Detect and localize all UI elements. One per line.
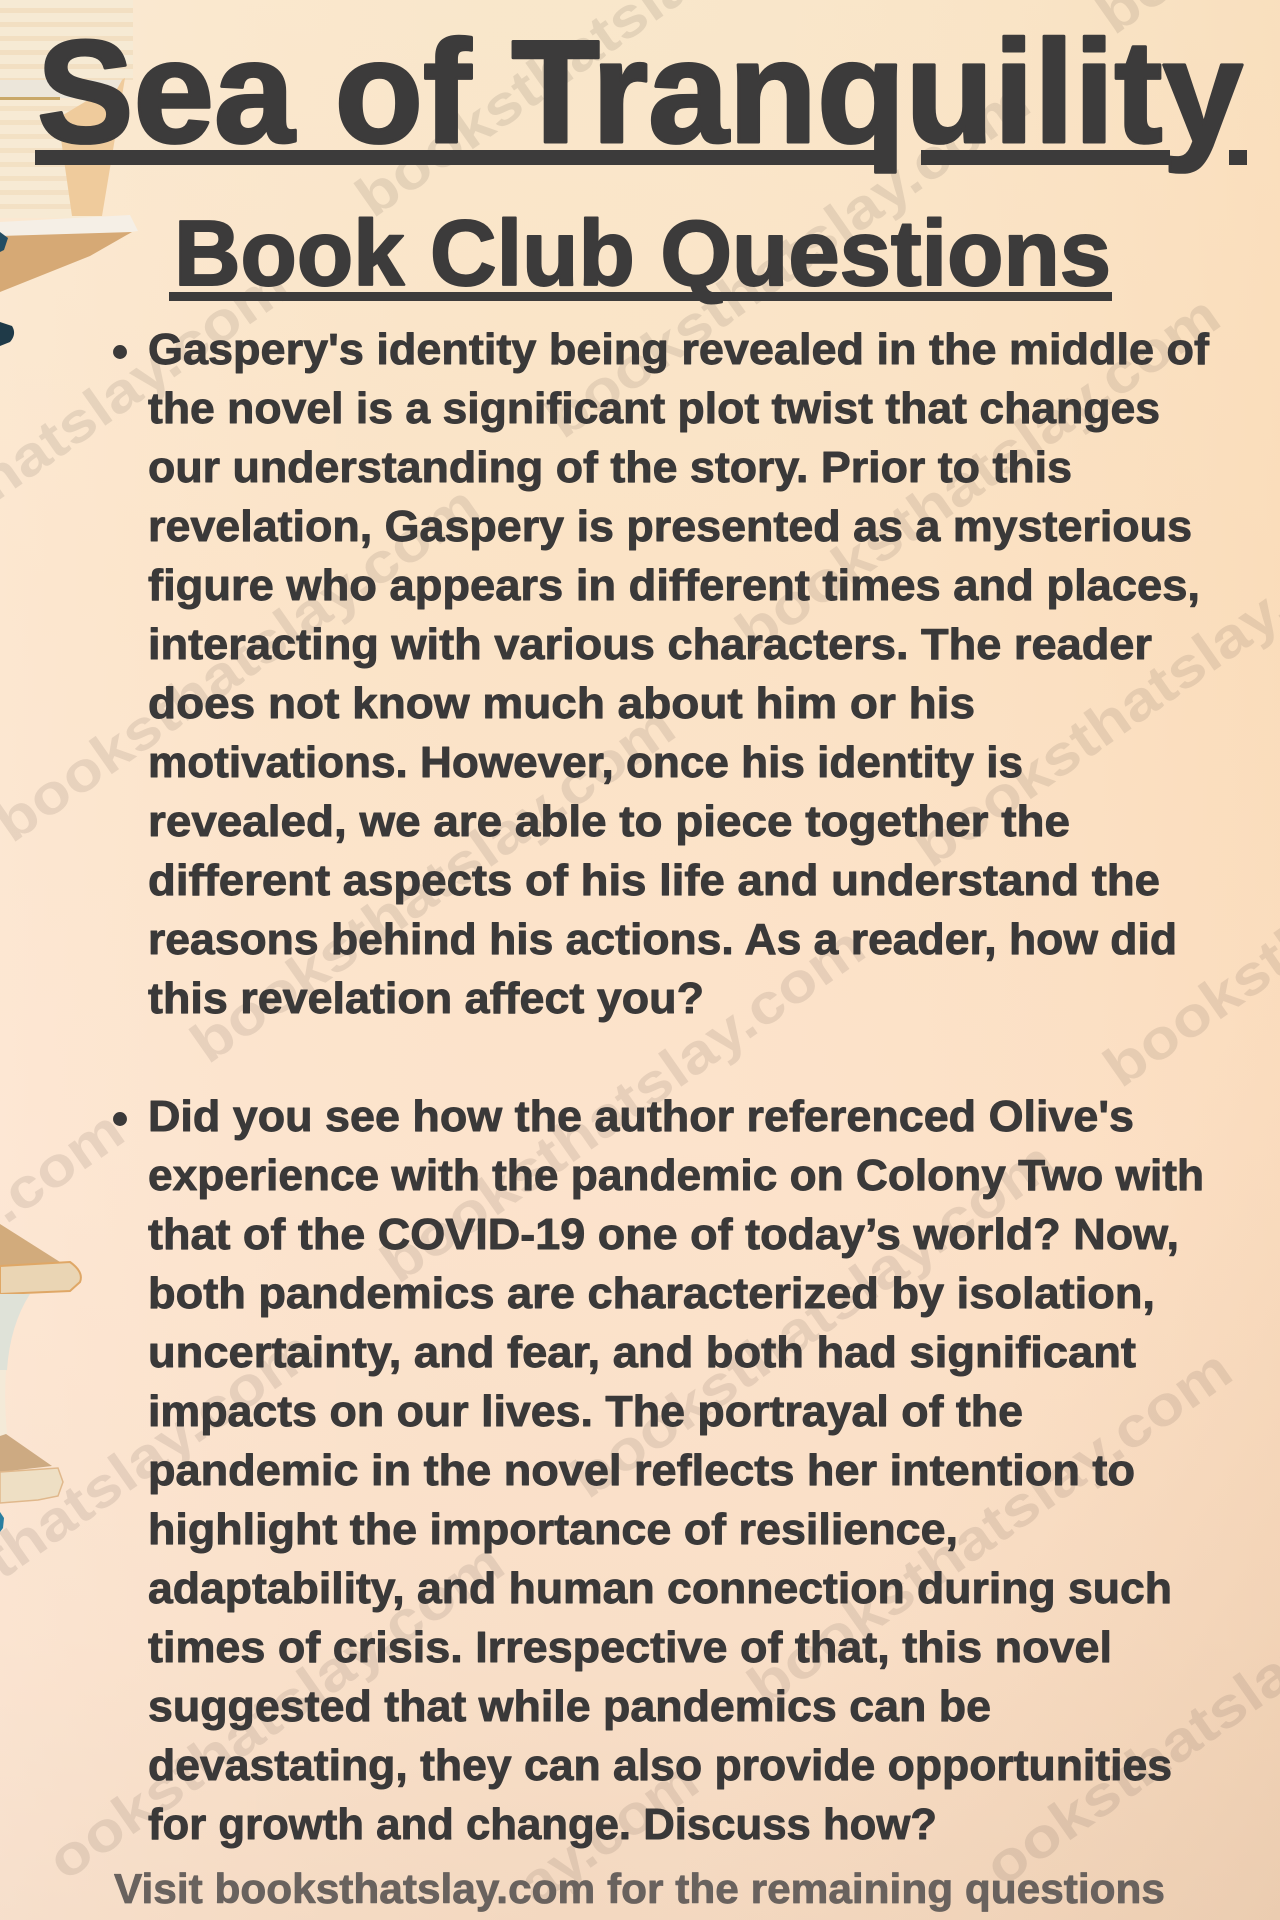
question 1: our understanding of the story. Prior to this (148, 443, 1072, 492)
bullet 2 (114, 1112, 126, 1126)
question 2: suggested that while pandemics can be (148, 1682, 991, 1731)
watermark: repeated diagonal site name: booksthatslay.com (534, 68, 1041, 450)
question 2: for growth and change. Discuss how? (148, 1800, 937, 1849)
question 1: this revelation affect you? (148, 974, 704, 1023)
watermark: repeated diagonal site name: booksthatslay.com (736, 1336, 1243, 1718)
question 1: reasons behind his actions. As a reader, how did (148, 915, 1177, 964)
footer call to action: Visit booksthatslay.com for the remaining questions (114, 1865, 1165, 1912)
question 1: different aspects of his life and understand the (148, 856, 1160, 905)
question 2: impacts on our lives. The portrayal of the (148, 1387, 1023, 1436)
decorative stacked books, top left (0, 0, 138, 346)
bullet 1 (114, 346, 126, 358)
question 1: motivations. However, once his identity is (148, 738, 1023, 787)
question 2: Did you see how the author referenced Olive's (148, 1092, 1134, 1141)
question 2: devastating, they can also provide opportunities (148, 1741, 1172, 1790)
question 2: pandemic in the novel reflects her intention to (148, 1446, 1135, 1495)
watermark: repeated diagonal site name: booksthatslay.com (559, 1128, 1066, 1510)
question 1: interacting with various characters. The reader (148, 620, 1152, 669)
question 1: figure who appears in different times and places, (148, 561, 1200, 610)
question 2 (114, 1092, 1204, 1849)
subtitle: Book Club Questions (174, 201, 1111, 305)
question 2: highlight the importance of resilience, (148, 1505, 958, 1554)
watermark: repeated diagonal site name: booksthatslay.com (179, 693, 686, 1075)
watermark: repeated diagonal site name: ay.com (507, 1748, 709, 1916)
title: Sea of Tranquility (37, 10, 1243, 173)
question 1: revealed, we are able to piece together the (148, 797, 1070, 846)
watermark: repeated diagonal site name: ooksthatslay.com (36, 1530, 515, 1892)
question 1 (114, 325, 1209, 1023)
question 1: Gaspery's identity being revealed in the middle of (148, 325, 1209, 374)
question 1: does not know much about him or his (148, 679, 975, 728)
question 1: the novel is a significant plot twist that changes (148, 384, 1160, 433)
question 2: times of crisis. Irrespective of that, this novel (148, 1623, 1112, 1672)
decorative stacked books, lower left (0, 1224, 81, 1532)
question 2: adaptability, and human connection during such (148, 1564, 1172, 1613)
watermark: repeated diagonal site name: booksthatslay.com (369, 913, 876, 1295)
question 2: uncertainty, and fear, and both had significant (148, 1328, 1136, 1377)
question 1: revelation, Gaspery is presented as a mysterious (148, 502, 1192, 551)
watermark: repeated diagonal site name: booksthatslay.com (724, 282, 1231, 664)
question 2: experience with the pandemic on Colony Two with (148, 1151, 1204, 1200)
question 2: that of the COVID-19 one of today’s world? Now, (148, 1210, 1179, 1259)
question 2: both pandemics are characterized by isolation, (148, 1269, 1155, 1318)
